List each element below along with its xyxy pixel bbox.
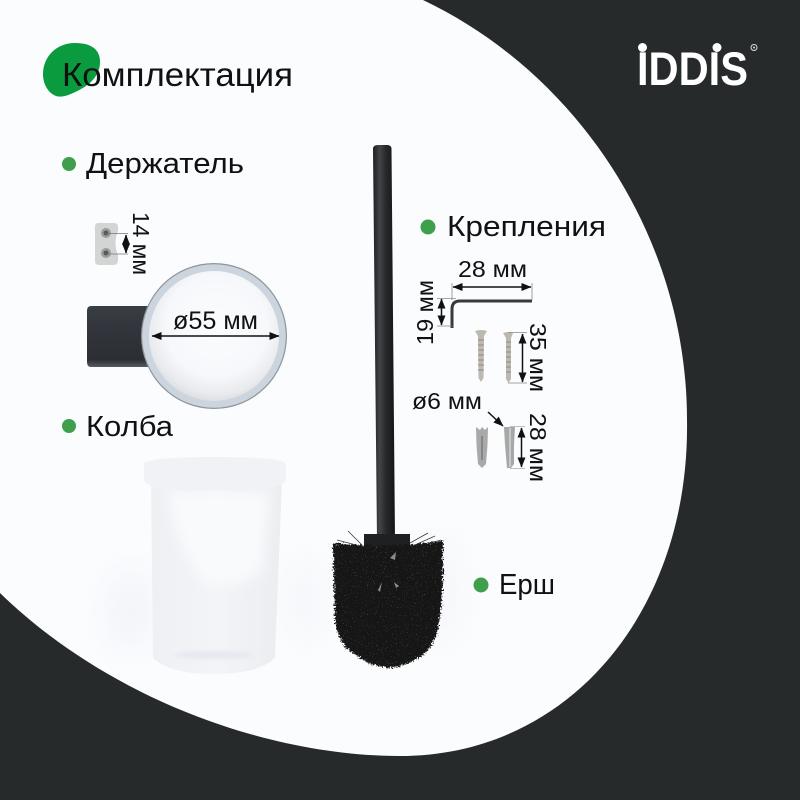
icon: toilet brush [333,145,443,668]
icon: holder ring with black arm [87,263,287,409]
title with green blob [43,43,293,97]
holder ring [141,263,287,409]
icon: frosted glass cup [144,457,286,674]
brush glints [378,552,399,592]
holder arm [87,306,160,367]
dimension: 28 mm anchor: 28 мм [525,413,551,482]
glass base tint [174,651,254,659]
dimension: 19 mm key height [412,280,456,345]
dimension: 19 mm key height: 19 мм [412,280,438,345]
brush stray bristles [337,531,441,546]
dimension: 14 mm [106,212,154,275]
dimension: diameter 55 mm [152,307,279,336]
label: крепления: Крепления [447,211,606,243]
brush handle [373,145,395,540]
icon: screws [475,330,513,383]
brush head [333,541,443,668]
brush collar [364,534,410,547]
dimension: 35 mm screw [508,323,551,392]
green blob accent [43,43,100,97]
dimension: 28 mm key width: 28 мм [458,256,527,282]
glass rim [144,457,286,491]
dimension: 14 mm: 14 мм [128,212,154,275]
dimension: 28 mm anchor [510,413,551,482]
logo: iddis: IDDIS [637,42,748,95]
icon: hex key [452,301,532,328]
dimension: diameter 6 mm [412,388,503,426]
soft product shadows [106,535,460,650]
heading: Комплектация [62,56,293,93]
dimension: diameter 55 mm: ø55 мм [173,307,258,335]
icon: mounting plate [95,223,118,265]
dimension: 35 mm screw: 35 мм [525,323,551,392]
label: ерш [474,569,555,601]
glass highlight [168,492,270,585]
label: держатель: Держатель [86,148,244,180]
icon: wall anchors [476,427,515,468]
dimension: 28 mm key width [452,256,532,300]
glass body [151,480,282,674]
label: ерш: Ерш [499,569,555,601]
dimension: diameter 6 mm: ø6 мм [412,388,482,414]
label: колба: Колба [86,411,174,443]
